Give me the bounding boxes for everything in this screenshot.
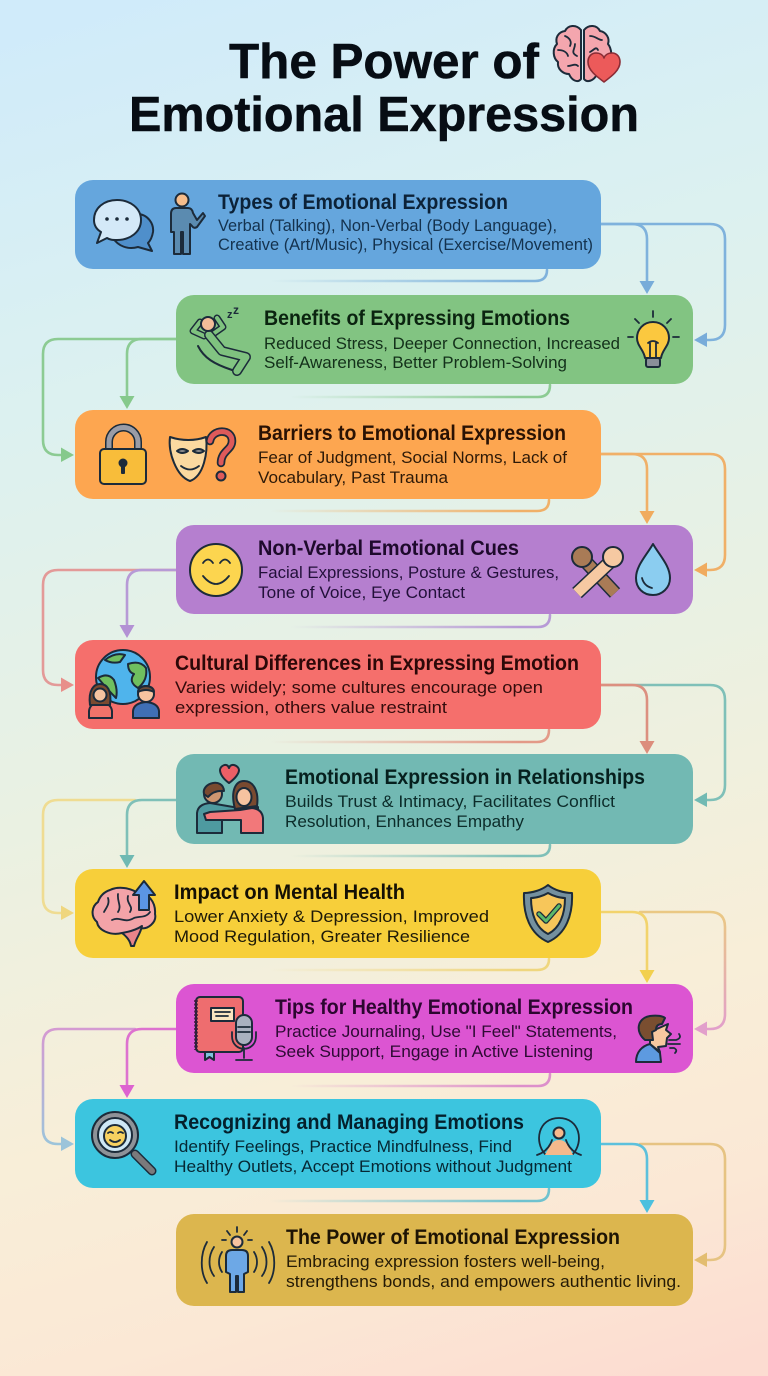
panel text: Barriers to Emotional Expression (258, 422, 566, 445)
title (129, 35, 639, 142)
panel text: Tone of Voice, Eye Contact (258, 584, 466, 602)
panel text: Types of Emotional Expression (218, 191, 508, 214)
connectors: card 5 to card 6 (270, 685, 725, 807)
panel text (175, 652, 579, 717)
panel text: Benefits of Expressing Emotions (264, 307, 570, 330)
connectors: card 2 to card 3 (43, 339, 550, 462)
connectors: card 4 to card 5 (43, 570, 550, 692)
panel text: Embracing expression fosters well-being, (286, 1253, 605, 1271)
icon: relaxing person (193, 303, 246, 371)
panel: mental health (75, 869, 601, 958)
panel: cultural differences (75, 640, 601, 729)
connectors: card 9 to card 10 (270, 1144, 725, 1267)
panel text: Seek Support, Engage in Active Listening (275, 1043, 593, 1061)
panel text: Impact on Mental Health (174, 881, 405, 904)
icon: meditating person (537, 1118, 581, 1155)
icon: shield (524, 885, 572, 942)
panel text: strengthens bonds, and empowers authentic living. (286, 1273, 681, 1291)
icon: brain with heart (554, 26, 620, 82)
panel text: Practice Journaling, Use "I Feel" Statements, (275, 1023, 617, 1041)
icon: couple with heart (197, 765, 263, 833)
panel: tips (176, 984, 693, 1073)
icon: magnifier with face (92, 1112, 152, 1171)
icon: padlock (100, 428, 146, 484)
panel text: Mood Regulation, Greater Resilience (174, 928, 470, 946)
panel text: Self-Awareness, Better Problem-Solving (264, 354, 567, 372)
panel: types of emotional expression (75, 180, 601, 269)
panel text: Fear of Judgment, Social Norms, Lack of (258, 449, 568, 467)
panel text: Lower Anxiety & Depression, Improved (174, 908, 489, 926)
connectors: card 6 to card 7 (43, 800, 550, 920)
icon: smiley (190, 544, 242, 596)
panel text: Builds Trust & Intimacy, Facilitates Conflict (285, 793, 616, 811)
panel text: Recognizing and Managing Emotions (174, 1111, 524, 1134)
panel text: Facial Expressions, Posture & Gestures, (258, 564, 559, 582)
panel text (285, 766, 645, 831)
panel text: Tips for Healthy Emotional Expression (275, 996, 633, 1019)
panel text: Verbal (Talking), Non-Verbal (Body Language), (218, 217, 557, 235)
icon: globe and people (89, 650, 159, 718)
connectors: card 7 to card 8 (270, 912, 725, 1036)
connectors: card 3 to card 4 (270, 454, 725, 577)
icon: water drop (636, 544, 670, 595)
panel: conclusion (176, 1214, 693, 1306)
panel text: Varies widely; some cultures encourage open (175, 679, 543, 697)
panel text: Identify Feelings, Practice Mindfulness, Find (174, 1138, 512, 1156)
panel text (218, 191, 593, 254)
icon: person exhaling (636, 1016, 680, 1062)
icon: radiating person (202, 1227, 274, 1292)
panel: relationships (176, 754, 693, 844)
icon: speech bubbles (94, 200, 153, 251)
panel text: Emotional Expression in Relationships (285, 766, 645, 789)
title: Emotional Expression (129, 88, 639, 142)
panel text: Reduced Stress, Deeper Connection, Increased (264, 335, 620, 353)
icon: relaxing person: z (233, 303, 239, 317)
panel text: expression, others value restraint (175, 699, 448, 717)
icon: brain with up arrow (93, 881, 155, 946)
panel text (286, 1226, 681, 1291)
icon: lightbulb (628, 311, 679, 367)
panel text: Creative (Art/Music), Physical (Exercise/Movement) (218, 236, 593, 254)
connectors: card 1 to card 2 (270, 224, 725, 347)
icon: mask and question mark (170, 432, 232, 481)
title: The Power of (229, 35, 540, 89)
panel text (258, 537, 559, 602)
panel text: Cultural Differences in Expressing Emotion (175, 652, 579, 675)
panel: benefits (176, 295, 693, 384)
panel text: Resolution, Enhances Empathy (285, 813, 525, 831)
panel: recognizing and managing (75, 1099, 601, 1188)
icon: notebook and microphone (196, 997, 256, 1060)
panel text: Healthy Outlets, Accept Emotions without Judgment (174, 1158, 573, 1176)
panel: non-verbal cues (176, 525, 693, 614)
panel: barriers (75, 410, 601, 499)
panel text (174, 1111, 573, 1176)
icon: gesturing person (171, 194, 205, 254)
panel text (264, 307, 620, 372)
icon: crossed arms (572, 547, 623, 593)
icon: relaxing person: z (227, 309, 233, 321)
panel text: The Power of Emotional Expression (286, 1226, 620, 1249)
panel text (174, 881, 489, 946)
panel text (258, 422, 568, 487)
panel text: Non-Verbal Emotional Cues (258, 537, 519, 560)
panel text (275, 996, 633, 1061)
connectors: card 8 to card 9 (43, 1029, 550, 1151)
panel text: Vocabulary, Past Trauma (258, 469, 448, 487)
